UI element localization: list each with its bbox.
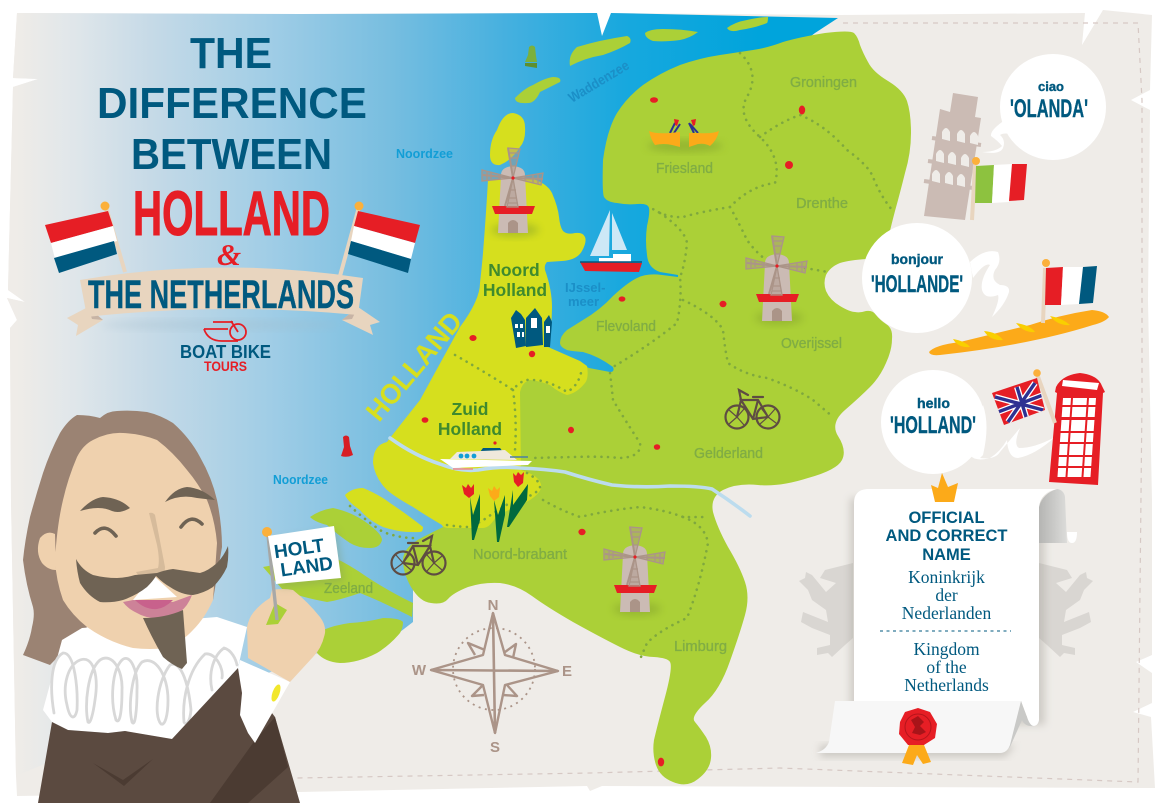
nose — [136, 513, 165, 575]
cuff button — [270, 683, 282, 703]
scroll heading: AND CORRECT — [886, 527, 1007, 545]
banner: The Netherlands — [67, 267, 380, 336]
logo tours: TOURS — [204, 359, 247, 374]
label: IJsselmeer: IJssel- — [565, 280, 605, 295]
label: Noordzee north: Noordzee — [396, 146, 453, 161]
icon: wax seal with ribbon — [899, 708, 937, 765]
hand — [247, 589, 325, 682]
map: provinces — [263, 17, 911, 784]
face — [55, 433, 217, 649]
icon: lighthouse north — [525, 46, 537, 68]
label: Noordzee south: Noordzee — [273, 472, 328, 487]
heraldic lion left — [799, 563, 853, 657]
Dutch name: der — [935, 585, 958, 605]
label: Gelderland: Gelderland — [694, 446, 763, 462]
label: Zuid Holland: Zuid — [452, 399, 488, 419]
speech bubble ciao — [982, 54, 1106, 160]
flag text: LAND — [279, 553, 334, 581]
teeth — [133, 575, 177, 600]
icon: tower of Pisa — [924, 93, 981, 220]
land: Ameland — [645, 29, 698, 41]
title line DIFFERENCE: DIFFERENCE — [97, 79, 367, 128]
icon: canal houses — [511, 308, 552, 348]
title line THE: THE — [190, 29, 272, 78]
Dutch name: Nederlanden — [902, 603, 991, 623]
English name: of the — [926, 657, 967, 677]
greeting: France — [862, 223, 1109, 355]
collar — [43, 617, 247, 739]
label: Friesland: Friesland — [656, 161, 713, 177]
label: Flevoland: Flevoland — [596, 319, 656, 335]
compass letter S: S — [490, 739, 500, 756]
bubble small text: ciao — [1038, 79, 1064, 94]
icon: windmill Overijssel — [746, 236, 807, 325]
land: Schiermonnikoog — [727, 17, 768, 31]
compass rose — [412, 597, 572, 756]
land: Zeeland north — [310, 508, 382, 548]
mustache — [76, 546, 228, 602]
icon: UK flag — [992, 369, 1055, 425]
English name: Kingdom — [913, 639, 980, 659]
label: Noord Holland: Holland — [483, 280, 547, 300]
coat shadow — [210, 717, 288, 803]
character: Dutchman — [23, 411, 345, 803]
scroll: official and correct name — [816, 473, 1077, 765]
land: Texel — [490, 113, 525, 165]
label: Waddenzee: Waddenzee — [565, 57, 632, 106]
province labels — [273, 57, 857, 655]
heading HOLLAND: HOLLAND — [133, 179, 330, 249]
icon: Italian flag — [972, 157, 1027, 220]
heraldic lion right — [1039, 563, 1093, 657]
logo: Boat Bike Tours — [180, 321, 271, 374]
bubble small text: bonjour — [891, 251, 944, 267]
land: Goeree — [345, 488, 423, 532]
cuff — [238, 660, 290, 743]
label: Noord-brabant: Noord-brabant — [473, 547, 567, 563]
icon: crown — [931, 473, 958, 502]
logo wordmark: BOAT BIKE — [180, 342, 271, 362]
label: Limburg: Limburg — [674, 639, 727, 655]
eyes — [95, 519, 202, 536]
compass letter W: W — [412, 662, 427, 679]
ampersand: & — [217, 237, 241, 272]
Dutch name: Koninkrijk — [908, 567, 985, 587]
HOLT LAND flag — [262, 526, 345, 625]
compass letter E: E — [562, 663, 572, 680]
icon: sailboat — [580, 210, 642, 272]
icon: bicycle Zeeland — [392, 536, 446, 574]
ear — [38, 533, 56, 570]
compass letter N: N — [488, 597, 498, 614]
eyebrows — [80, 487, 215, 512]
English name: Netherlands — [904, 675, 989, 695]
label: IJsselmeer: meer — [568, 294, 599, 309]
icon: windmill Noord Holland — [482, 148, 543, 237]
province borders — [350, 53, 892, 657]
stitched border — [297, 23, 1142, 782]
icon: phone box — [1049, 373, 1105, 485]
scroll heading: NAME — [922, 546, 971, 564]
title — [97, 29, 367, 179]
river — [390, 438, 750, 516]
label: Zuid Holland: Holland — [438, 419, 502, 439]
land: Holland provinces — [373, 178, 588, 528]
icon: French flag — [1042, 259, 1097, 323]
land: Vlieland — [515, 77, 560, 103]
flag text: HOLT — [273, 535, 326, 563]
bubble word: 'HOLLANDE' — [871, 271, 963, 298]
label: Noord Holland: Noord — [488, 260, 540, 280]
bubble small text: hello — [917, 396, 950, 411]
greeting: UK — [881, 369, 1105, 485]
flag: right Dutch — [340, 202, 420, 276]
land: Zeeland middle — [263, 557, 413, 617]
lower lip — [123, 595, 192, 618]
banner text: THE NETHERLANDS — [88, 273, 354, 317]
goatee — [143, 610, 187, 669]
land: Terschelling — [570, 36, 631, 66]
label: Groningen: Groningen — [790, 75, 857, 91]
bubble word: 'OLANDA' — [1010, 95, 1088, 123]
label: Zeeland: Zeeland — [324, 581, 373, 597]
speech bubble hello — [881, 370, 1055, 474]
icon: baguette — [929, 310, 1109, 355]
speech bubble bonjour — [862, 223, 1009, 333]
icon: bicycle Gelderland — [726, 390, 780, 428]
label: Overijssel: Overijssel — [781, 336, 842, 352]
coat — [38, 668, 300, 803]
label: HOLLAND along coast: HOLLAND — [360, 306, 468, 427]
bubble word: 'HOLLAND' — [890, 412, 976, 439]
greeting: Italy — [924, 54, 1106, 220]
sea — [7, 13, 838, 776]
city dots — [422, 97, 805, 766]
scroll heading: OFFICIAL — [908, 509, 985, 527]
title line BETWEEN: BETWEEN — [131, 130, 332, 179]
icon: clogs with tulips — [647, 119, 723, 152]
land: the Netherlands mainland — [403, 32, 911, 784]
icon: lighthouse south — [341, 436, 353, 457]
label: Drenthe: Drenthe — [796, 196, 848, 212]
flag: left Dutch — [45, 202, 125, 273]
coat chevron — [93, 759, 153, 786]
icon: tulips — [462, 472, 528, 542]
icon: cruise ship — [440, 441, 532, 469]
icon: windmill Noord-Brabant — [604, 527, 665, 616]
tongue — [135, 600, 173, 609]
hair — [23, 411, 222, 665]
land: Zeeland south — [317, 618, 403, 663]
